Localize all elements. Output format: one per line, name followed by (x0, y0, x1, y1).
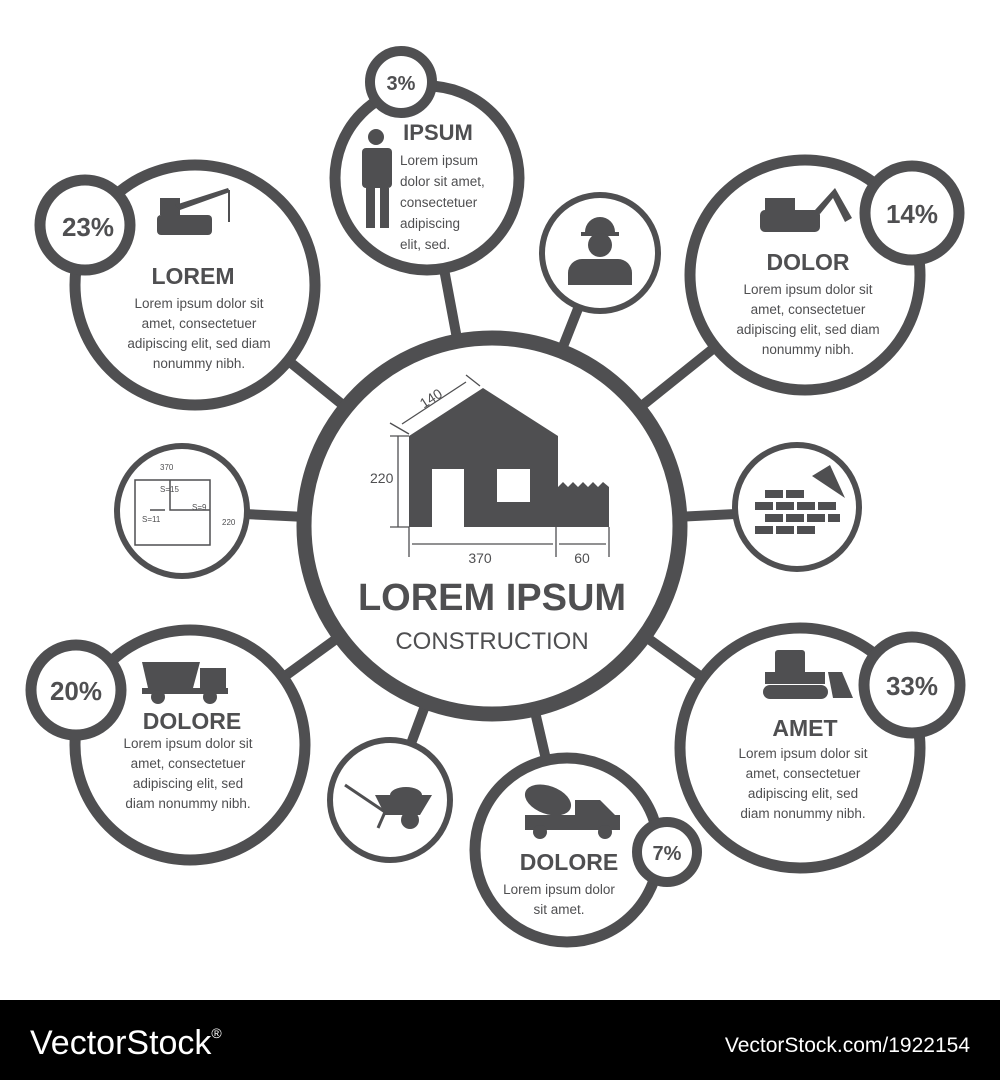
panel: ipsum: consectetuer (400, 195, 478, 210)
panel: ipsum: elit, sed. (400, 237, 450, 252)
icon: floor plan: S=11 (142, 515, 161, 524)
panel: ipsum: 3% (387, 73, 416, 95)
icon: house with dimensions: 60 (574, 550, 590, 566)
panel: dolore left: DOLORE (143, 708, 241, 734)
icon: house with dimensions: 220 (370, 470, 394, 486)
panel: ipsum (335, 51, 519, 270)
panel: dolor (690, 160, 959, 390)
central hub (304, 338, 680, 714)
footer bar (0, 1000, 1000, 1080)
panel: dolor: nonummy nibh. (762, 342, 854, 357)
panel: dolore left: Lorem ipsum dolor sit (123, 736, 253, 751)
panel: dolore bottom: Lorem ipsum dolor (503, 882, 615, 897)
panel: dolore left: amet, consectetuer (131, 756, 246, 771)
panel: lorem: 23% (62, 212, 114, 242)
panel: amet: 33% (886, 671, 938, 701)
icon: worker (542, 195, 658, 311)
icon: house with dimensions: 140 (417, 385, 445, 411)
panel: dolor: Lorem ipsum dolor sit (743, 282, 873, 297)
panel: dolore left: adipiscing elit, sed (133, 776, 243, 791)
panel: dolor: DOLOR (766, 249, 850, 275)
icon: house with dimensions (370, 375, 609, 566)
panel: lorem: adipiscing elit, sed diam (127, 336, 271, 351)
panel: dolor: adipiscing elit, sed diam (736, 322, 880, 337)
panel: amet: Lorem ipsum dolor sit (738, 746, 868, 761)
icon: floor plan: S=15 (160, 485, 179, 494)
panel: dolore left (31, 630, 305, 860)
icon: wheelbarrow (330, 740, 450, 860)
footer bar: VectorStock.com/1922154 (725, 1034, 970, 1057)
icon: floor plan (117, 446, 247, 576)
footer bar: VectorStock (30, 1024, 211, 1062)
title: LOREM IPSUM (358, 577, 626, 619)
panel: lorem: nonummy nibh. (153, 356, 245, 371)
panel: ipsum: dolor sit amet, (400, 174, 485, 189)
panel: dolore bottom (475, 758, 697, 942)
icon: bricks (735, 445, 859, 569)
panel: ipsum: adipiscing (400, 216, 460, 231)
panel: amet: adipiscing elit, sed (748, 786, 858, 801)
panel: dolore bottom: 7% (653, 843, 682, 865)
panel: dolor: 14% (886, 199, 938, 229)
icon: floor plan: 220 (222, 518, 236, 527)
panel: dolore bottom: DOLORE (520, 849, 618, 875)
panel: dolore bottom: sit amet. (533, 902, 585, 917)
panel: dolor: amet, consectetuer (751, 302, 866, 317)
panel: dolore left: 20% (50, 676, 102, 706)
icon: house with dimensions: 370 (468, 550, 492, 566)
panel: amet: amet, consectetuer (746, 766, 861, 781)
panel: lorem: Lorem ipsum dolor sit (134, 296, 264, 311)
panel: lorem: LOREM (151, 263, 235, 289)
panel: ipsum: IPSUM (403, 120, 473, 145)
icon: floor plan: S=9 (192, 503, 207, 512)
footer bar: ® (211, 1025, 222, 1041)
icon: floor plan: 370 (160, 463, 174, 472)
panel: ipsum: Lorem ipsum (400, 153, 478, 168)
panel: lorem: amet, consectetuer (142, 316, 257, 331)
panel: amet (680, 628, 960, 868)
panel: amet: diam nonummy nibh. (740, 806, 866, 821)
panel: lorem (40, 165, 315, 405)
panel: dolore left: diam nonummy nibh. (125, 796, 251, 811)
panel: amet: AMET (772, 715, 838, 741)
subtitle: CONSTRUCTION (395, 628, 589, 655)
